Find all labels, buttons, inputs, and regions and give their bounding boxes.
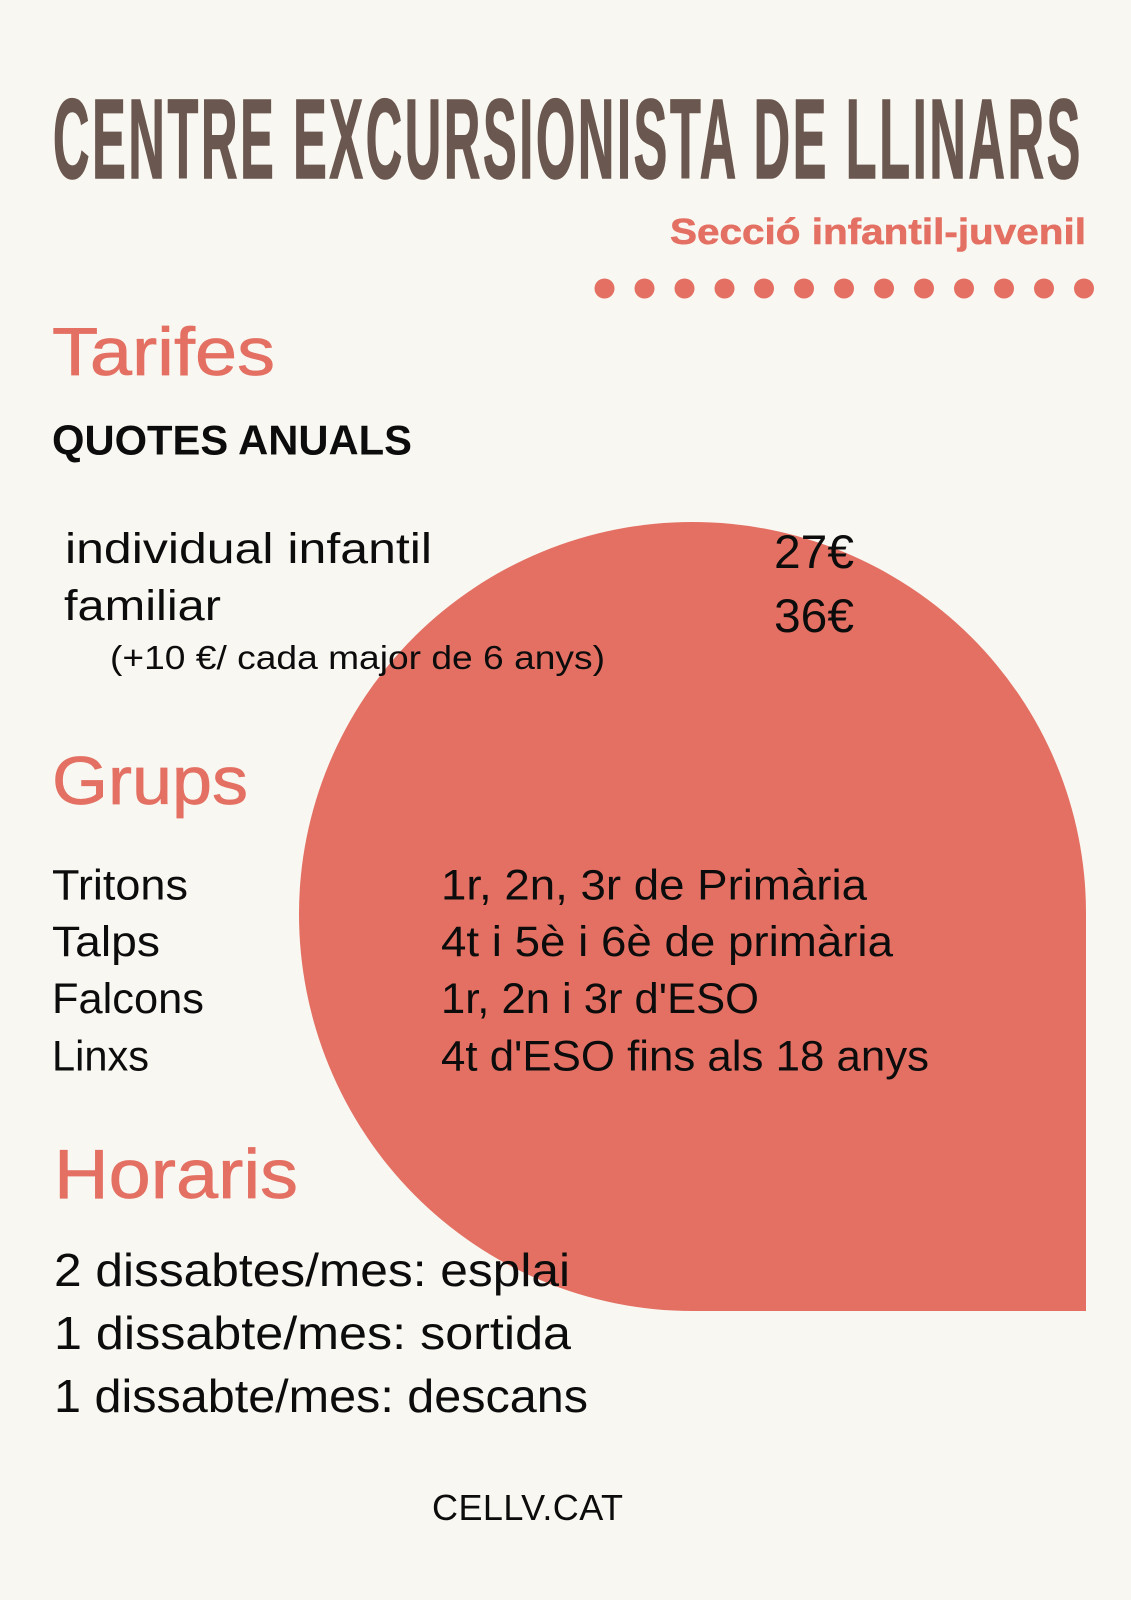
- group ages: Falcons: 1r, 2n i 3r d'ESO: [441, 975, 759, 1023]
- dotted row: [594, 278, 1094, 298]
- fee value: 27 euros: 27€: [774, 525, 854, 578]
- group name: Tritons: Tritons: [52, 862, 188, 910]
- group ages: Linxs: 4t d'ESO fins als 18 anys: [441, 1032, 929, 1080]
- section: grups: [52, 743, 929, 1080]
- fee label: individual infantil: individual infantil: [65, 525, 432, 573]
- subheading: quotes anuals: QUOTES ANUALS: [52, 416, 412, 464]
- fee note: (+10 €/ cada major de 6 anys): [110, 639, 605, 676]
- fee value: 36 euros: 36€: [774, 589, 854, 642]
- group name: Falcons: Falcons: [52, 975, 204, 1023]
- group name: Linxs: Linxs: [52, 1032, 149, 1080]
- section: horaris: [54, 1135, 588, 1422]
- schedule line: sortida: 1 dissabte/mes: sortida: [54, 1307, 571, 1359]
- section: tarifes: [52, 314, 854, 676]
- schedule line: esplai: 2 dissabtes/mes: esplai: [54, 1244, 570, 1296]
- decorative coral teardrop shape: [299, 522, 1086, 1311]
- schedule line: descans: 1 dissabte/mes: descans: [54, 1370, 588, 1422]
- group name: Talps: Talps: [52, 918, 160, 966]
- fee label: familiar: familiar: [64, 582, 221, 630]
- subtitle: Secció infantil-juvenil: [670, 211, 1086, 252]
- heading: Horaris: Horaris: [54, 1135, 298, 1213]
- footer website: CELLV.CAT: [432, 1487, 623, 1528]
- heading: Grups: Grups: [52, 743, 248, 819]
- heading: Tarifes: Tarifes: [52, 314, 275, 390]
- group ages: Talps: 4t i 5è i 6è de primària: [441, 918, 893, 966]
- group ages: Tritons: 1r, 2n, 3r de Primària: [441, 862, 867, 910]
